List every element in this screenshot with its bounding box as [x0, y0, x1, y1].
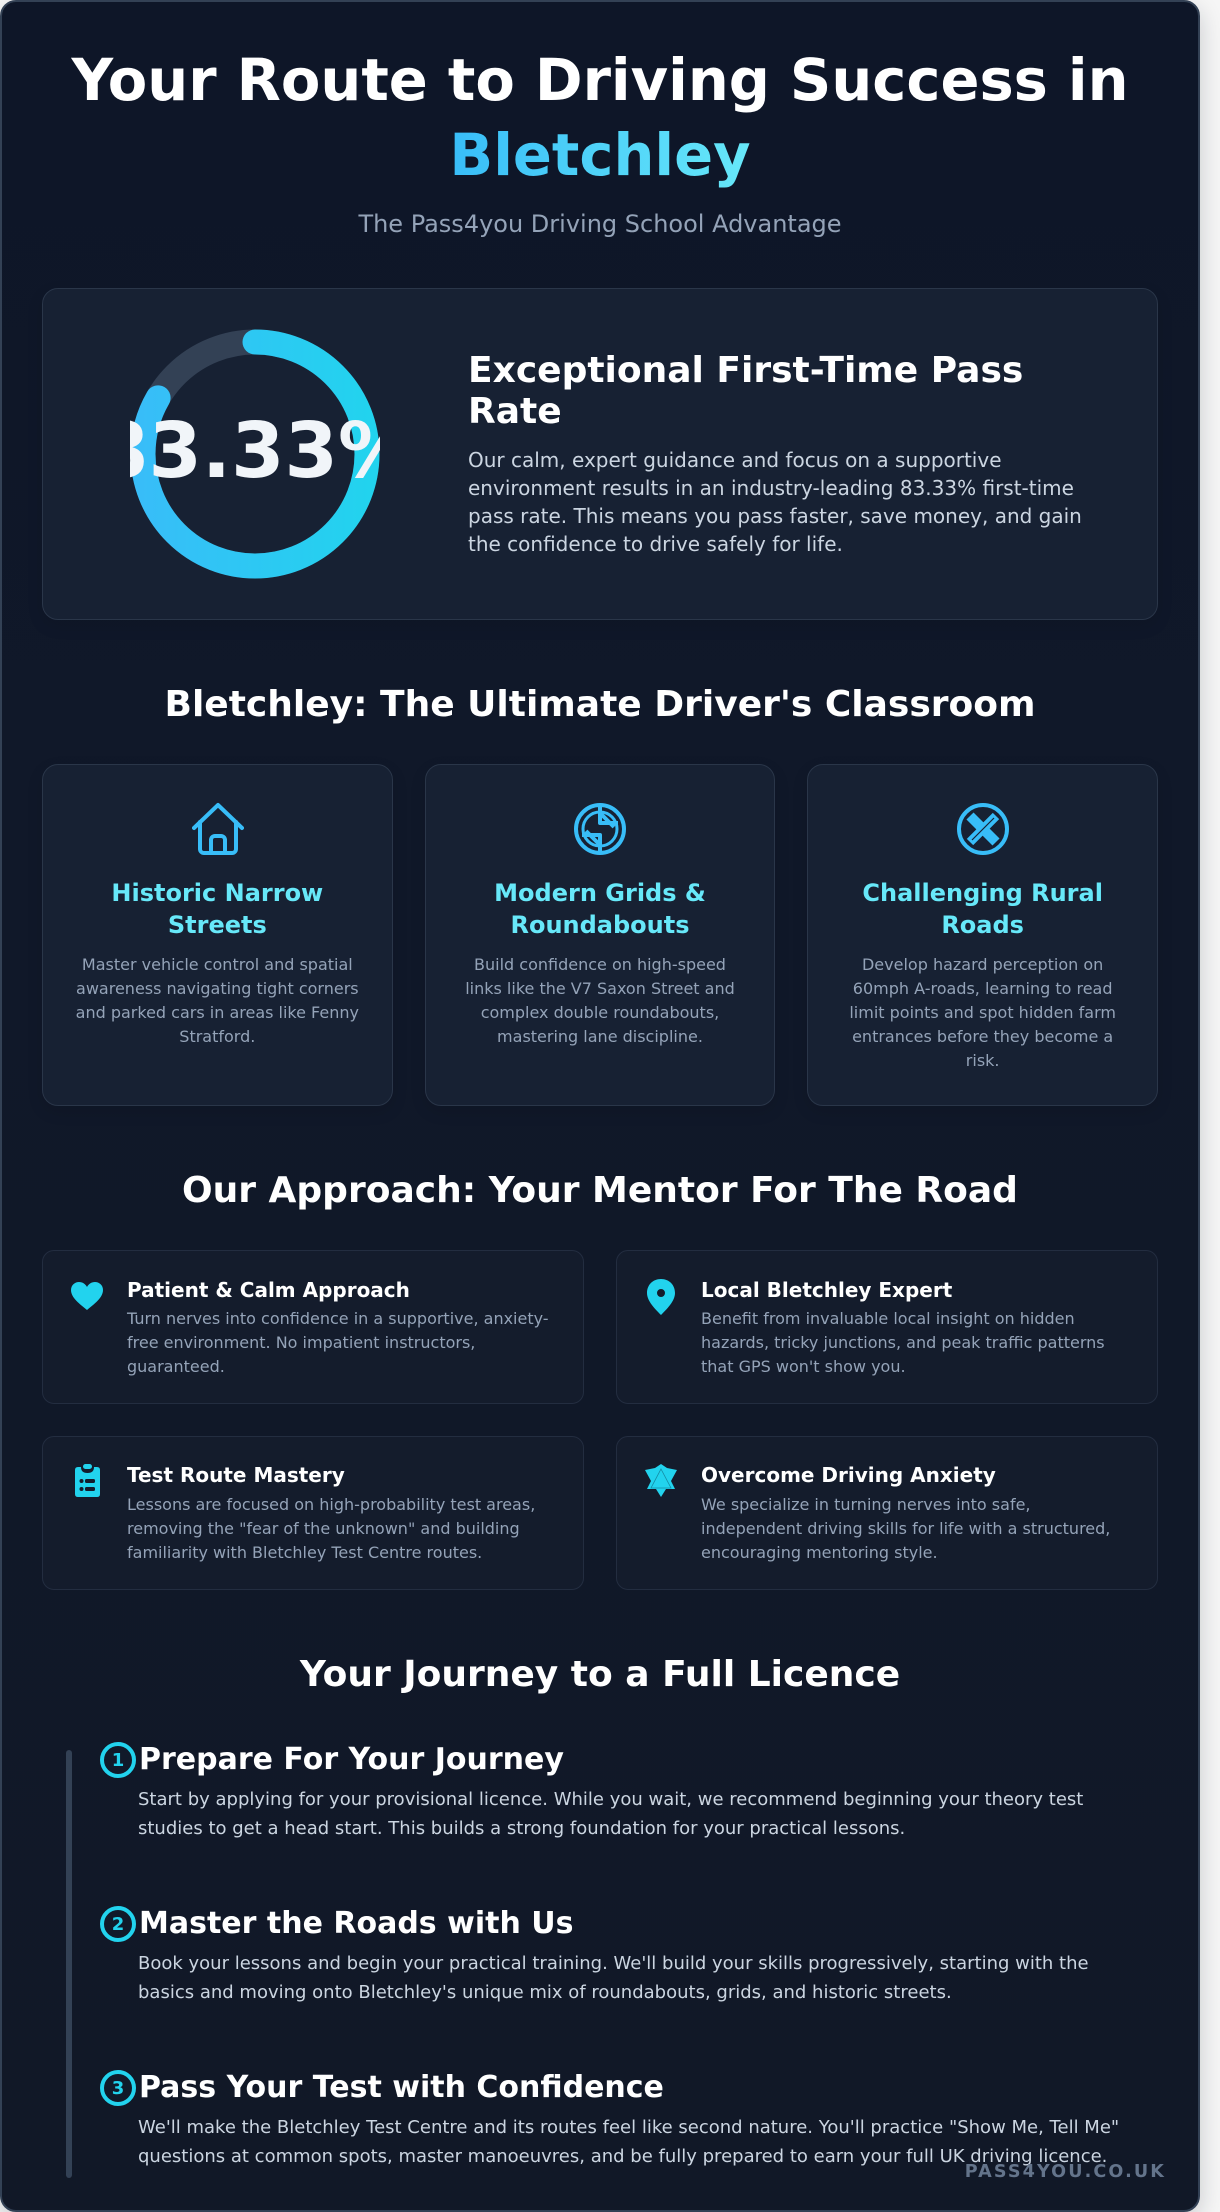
step number: 1 [112, 1750, 124, 1771]
step 3 [100, 2070, 1119, 2167]
feature text [127, 1495, 535, 1562]
feature text [701, 1309, 1105, 1376]
card title [862, 879, 1103, 939]
feature text: encouraging mentoring style. [701, 1543, 938, 1562]
card title [494, 879, 706, 939]
step text: studies to get a head start. This builds a strong foundation for your practical lessons. [138, 1818, 905, 1839]
card text: links like the V7 Saxon Street and [465, 979, 735, 998]
icon: roundabout [574, 803, 626, 855]
icon: star badge [645, 1464, 677, 1497]
step text: Start by applying for your provisional licence. While you wait, we recommend beginning your theory test [138, 1789, 1083, 1810]
pass rate heading: Rate [468, 391, 562, 432]
card title: Historic Narrow [111, 879, 323, 907]
panel: patient and calm [42, 1250, 584, 1404]
step number [100, 1742, 136, 1778]
step title: Prepare For Your Journey [139, 1742, 564, 1777]
card text: 60mph A-roads, learning to read [853, 979, 1113, 998]
pass rate text [468, 448, 1082, 556]
feature text: removing the "fear of the unknown" and building [127, 1519, 520, 1538]
pass rate text: environment results in an industry-leading 83.33% first-time [468, 476, 1074, 500]
card text [76, 955, 359, 1046]
feature text [126, 1309, 549, 1376]
feature text: We specialize in turning nerves into safe, [701, 1495, 1030, 1514]
card text: Build confidence on high-speed [474, 955, 726, 974]
pass rate text: pass rate. This means you pass faster, save money, and gain [468, 504, 1082, 528]
card text: risk. [966, 1051, 1000, 1070]
card title: Roads [941, 911, 1024, 939]
pass rate heading: Exceptional First-Time Pass [468, 350, 1023, 391]
feature text: Benefit from invaluable local insight on hidden [701, 1309, 1075, 1328]
step number [100, 1906, 136, 1942]
panel: overcome anxiety [616, 1436, 1158, 1590]
step title: Master the Roads with Us [139, 1906, 573, 1941]
card text [465, 955, 735, 1046]
feature text: Lessons are focused on high-probability test areas, [127, 1495, 535, 1514]
feature text: that GPS won't show you. [701, 1357, 906, 1376]
card title: Modern Grids & [494, 879, 706, 907]
card text: Master vehicle control and spatial [82, 955, 353, 974]
heading: journey: Your Journey to a Full Licence [300, 1654, 900, 1695]
feature text: familiarity with Bletchley Test Centre routes. [127, 1543, 482, 1562]
step number [100, 2070, 136, 2106]
card text: limit points and spot hidden farm [849, 1003, 1116, 1022]
feature text: free environment. No impatient instructors, [127, 1333, 475, 1352]
panel: historic narrow streets [42, 764, 393, 1106]
card title: Roundabouts [510, 911, 690, 939]
icon: crossroads [957, 803, 1009, 855]
step text: questions at common spots, master manoeuvres, and be fully prepared to earn your full UK driving licence. [138, 2146, 1107, 2167]
icon: heart [71, 1282, 103, 1310]
card text [849, 955, 1116, 1070]
card text: mastering lane discipline. [497, 1027, 703, 1046]
step text [138, 1953, 1089, 2003]
feature text: Turn nerves into confidence in a supportive, anxiety- [127, 1309, 549, 1328]
feature title: Overcome Driving Anxiety [701, 1463, 996, 1487]
feature text [701, 1495, 1110, 1562]
feature title: Local Bletchley Expert [701, 1278, 952, 1302]
step text [138, 1789, 1083, 1839]
feature text: guaranteed. [127, 1357, 225, 1376]
step text: basics and moving onto Bletchley's unique mix of roundabouts, grids, and historic streets. [138, 1982, 952, 2003]
step number: 3 [112, 2078, 124, 2099]
pass rate heading [468, 350, 1023, 432]
step text [138, 2117, 1119, 2167]
card text: entrances before they become a [852, 1027, 1113, 1046]
card text: awareness navigating tight corners [76, 979, 359, 998]
icon: clipboard [75, 1464, 100, 1497]
feature title: Patient & Calm Approach [127, 1278, 410, 1302]
card text: and parked cars in areas like Fenny [76, 1003, 359, 1022]
pass rate text: the confidence to drive safely for life. [468, 532, 843, 556]
card text: Stratford. [179, 1027, 255, 1046]
panel: rural roads [807, 764, 1158, 1106]
feature text: hazards, tricky junctions, and peak traffic patterns [701, 1333, 1105, 1352]
heading: classroom: Bletchley: The Ultimate Driver's Classroom [164, 684, 1035, 725]
donut chart: 83.33% [130, 330, 380, 578]
card text: complex double roundabouts, [481, 1003, 719, 1022]
panel: pass rate [42, 288, 1158, 620]
subtitle: The Pass4you Driving School Advantage [358, 210, 842, 238]
title: Your Route to Driving Success in [71, 47, 1129, 114]
pass rate text: Our calm, expert guidance and focus on a supportive [468, 448, 1002, 472]
title: Bletchley [449, 122, 751, 189]
step title: Pass Your Test with Confidence [139, 2070, 664, 2105]
card title: Challenging Rural [862, 879, 1103, 907]
title [71, 47, 1129, 189]
card text: Develop hazard perception on [862, 955, 1103, 974]
heading: approach: Our Approach: Your Mentor For The Road [182, 1170, 1018, 1211]
panel: modern grids [425, 764, 775, 1106]
panel: test route mastery [42, 1436, 584, 1590]
card title [111, 879, 323, 939]
icon: house [192, 802, 244, 855]
step number: 2 [112, 1914, 124, 1935]
panel: local expert [616, 1250, 1158, 1404]
step 2 [100, 1906, 1089, 2003]
icon: map pin [647, 1279, 675, 1315]
card title: Streets [168, 911, 267, 939]
timeline bar [66, 1750, 72, 2178]
step text: Book your lessons and begin your practical training. We'll build your skills progressively, starting with the [138, 1953, 1089, 1974]
feature title: Test Route Mastery [127, 1463, 345, 1487]
step text: We'll make the Bletchley Test Centre and its routes feel like second nature. You'll practice "Show Me, Tell Me" [138, 2117, 1119, 2138]
step 1 [100, 1742, 1083, 1839]
feature text: independent driving skills for life with a structured, [701, 1519, 1110, 1538]
watermark: PASS4YOU.CO.UK [965, 2162, 1166, 2182]
